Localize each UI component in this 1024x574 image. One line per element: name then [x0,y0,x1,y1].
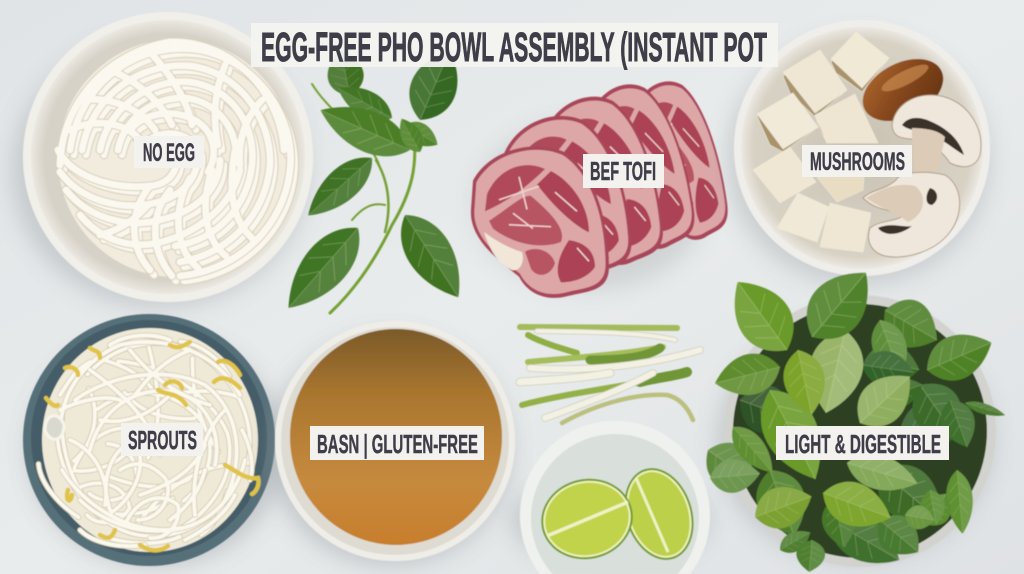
label: no egg [134,136,204,168]
lemongrass strips [520,327,700,423]
label: mushrooms: MUSHROOMS [810,148,905,176]
leaves [272,41,477,322]
basil leaves [696,255,1007,574]
bowl: bean sprouts [13,302,295,574]
beef slices [471,75,732,298]
label: broth gluten-free [310,426,484,460]
mushroom halves [863,95,981,257]
label: sprouts: SPROUTS [128,425,197,455]
label: broth gluten-free: BASN | GLUTEN-FREE [317,429,478,459]
bowl: lime wedges [510,421,710,574]
label: beef tofu: BEF TOFI [590,156,656,186]
sprouts [13,302,295,574]
tofu cubes [753,32,889,252]
front fat edge [484,232,523,270]
stems [312,84,415,313]
noodles [58,39,295,281]
herb sprig with stems [272,41,477,322]
bowl: fresh basil [696,255,1007,574]
label: light and digestible [776,426,949,460]
brown mushroom [852,46,954,134]
label: beef tofu [583,154,664,188]
title banner [251,23,778,70]
lime wedges [534,459,705,569]
bowl: rice noodles [12,12,313,308]
label: sprouts [121,423,203,456]
label: mushrooms [802,145,912,177]
bowl: tofu and mushrooms [726,20,990,285]
bowl: broth [268,321,515,566]
label: no egg: NO EGG [143,139,195,167]
